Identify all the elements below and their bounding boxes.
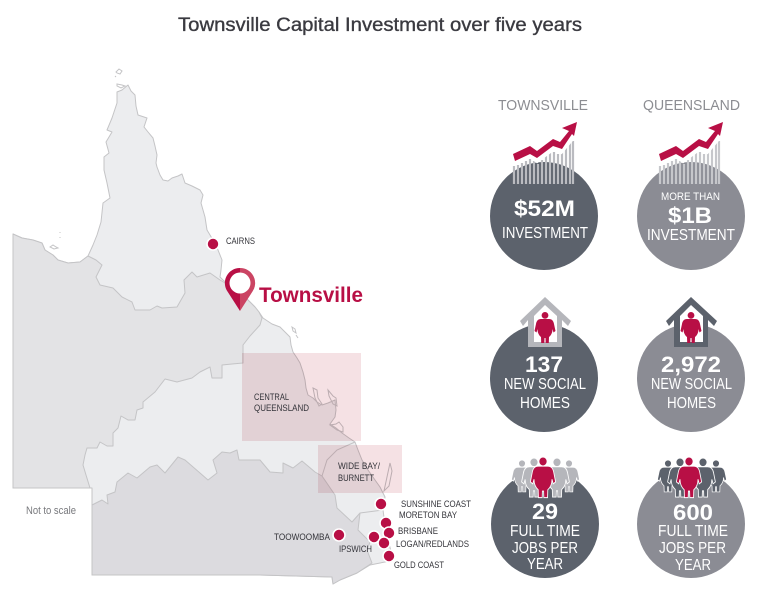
stat: Queensland investment: INVESTMENT [647, 227, 735, 244]
map: islands [50, 69, 392, 491]
markers: south-east Queensland cities: LOGAN/REDLANDS [396, 539, 469, 549]
stat: Townsville social homes: 137 [525, 352, 563, 377]
label: Central Queensland [254, 392, 309, 413]
stat: Queensland social homes: NEW SOCIAL [651, 376, 732, 393]
label: Central Queensland: QUEENSLAND [254, 403, 309, 413]
label: Townsville: Townsville [259, 284, 363, 307]
stat: Townsville investment: INVESTMENT [502, 225, 588, 242]
heading: Queensland column: QUEENSLAND [643, 97, 740, 114]
map: Wide Bay overlay [318, 445, 402, 493]
map: south-west region [92, 450, 372, 584]
map: north-west region [13, 234, 262, 488]
stat: Queensland social homes: 2,972 [661, 352, 721, 377]
map: inner boundary lines [322, 442, 383, 513]
stat: Townsville jobs: 29 [532, 499, 558, 524]
title: Townsville Capital Investment over five years [178, 15, 582, 36]
stat: Queensland jobs: FULL TIME [658, 523, 728, 540]
stat: Townsville jobs [491, 457, 599, 578]
stat: Townsville social homes: HOMES [520, 395, 570, 412]
map of Queensland [13, 69, 402, 584]
stat: Queensland jobs: 600 [673, 500, 713, 525]
stat: Townsville investment: $52M [514, 196, 575, 221]
marker: Townsville pin [225, 268, 255, 311]
icon: house with person [666, 297, 717, 347]
stat: Queensland investment: MORE THAN [661, 191, 720, 203]
stat: Queensland jobs: YEAR [675, 557, 711, 574]
markers: south-east Queensland cities: SUNSHINE COAST [401, 499, 471, 509]
heading: Townsville column: TOWNSVILLE [498, 97, 588, 114]
stat: Townsville jobs: FULL TIME [510, 523, 580, 540]
markers: south-east Queensland cities: GOLD COAST [394, 560, 444, 570]
icon: house with person [520, 297, 571, 347]
markers: south-east Queensland cities: IPSWICH [339, 544, 372, 554]
label: Not to scale: Not to scale [26, 505, 76, 517]
markers: south-east Queensland cities: TOOWOOMBA [274, 532, 330, 542]
markers: south-east Queensland cities [274, 498, 471, 570]
markers: south-east Queensland cities: MORETON BAY [399, 510, 457, 520]
stat: Queensland investment: $1B [668, 203, 712, 228]
icon: group of people [512, 457, 580, 498]
icon: rising chart [659, 122, 723, 184]
icon: group of people [658, 457, 726, 498]
marker: Cairns: CAIRNS [226, 236, 255, 246]
map: state silhouette [13, 85, 392, 584]
markers: south-east Queensland cities: BRISBANE [398, 526, 438, 536]
label: Central Queensland: CENTRAL [254, 392, 289, 402]
stat: Queensland investment [637, 122, 745, 270]
stat: Queensland jobs [637, 457, 745, 578]
stat: Townsville social homes: NEW SOCIAL [504, 376, 586, 393]
stat: Queensland social homes: HOMES [667, 395, 716, 412]
label: Wide Bay Burnett: WIDE BAY/ [338, 461, 380, 471]
map: Central Queensland overlay [242, 353, 361, 441]
stat: Townsville jobs: YEAR [527, 556, 563, 573]
label: Wide Bay Burnett: BURNETT [338, 473, 374, 483]
marker: Cairns [207, 236, 255, 250]
stat: Townsville jobs: JOBS PER [512, 540, 578, 557]
stat: Queensland jobs: JOBS PER [659, 540, 726, 557]
stat: Queensland social homes [637, 297, 745, 432]
icon: rising chart [513, 122, 577, 184]
stat: Townsville social homes [490, 297, 598, 432]
label: Wide Bay Burnett [338, 461, 380, 483]
stat: Townsville investment [490, 122, 598, 270]
